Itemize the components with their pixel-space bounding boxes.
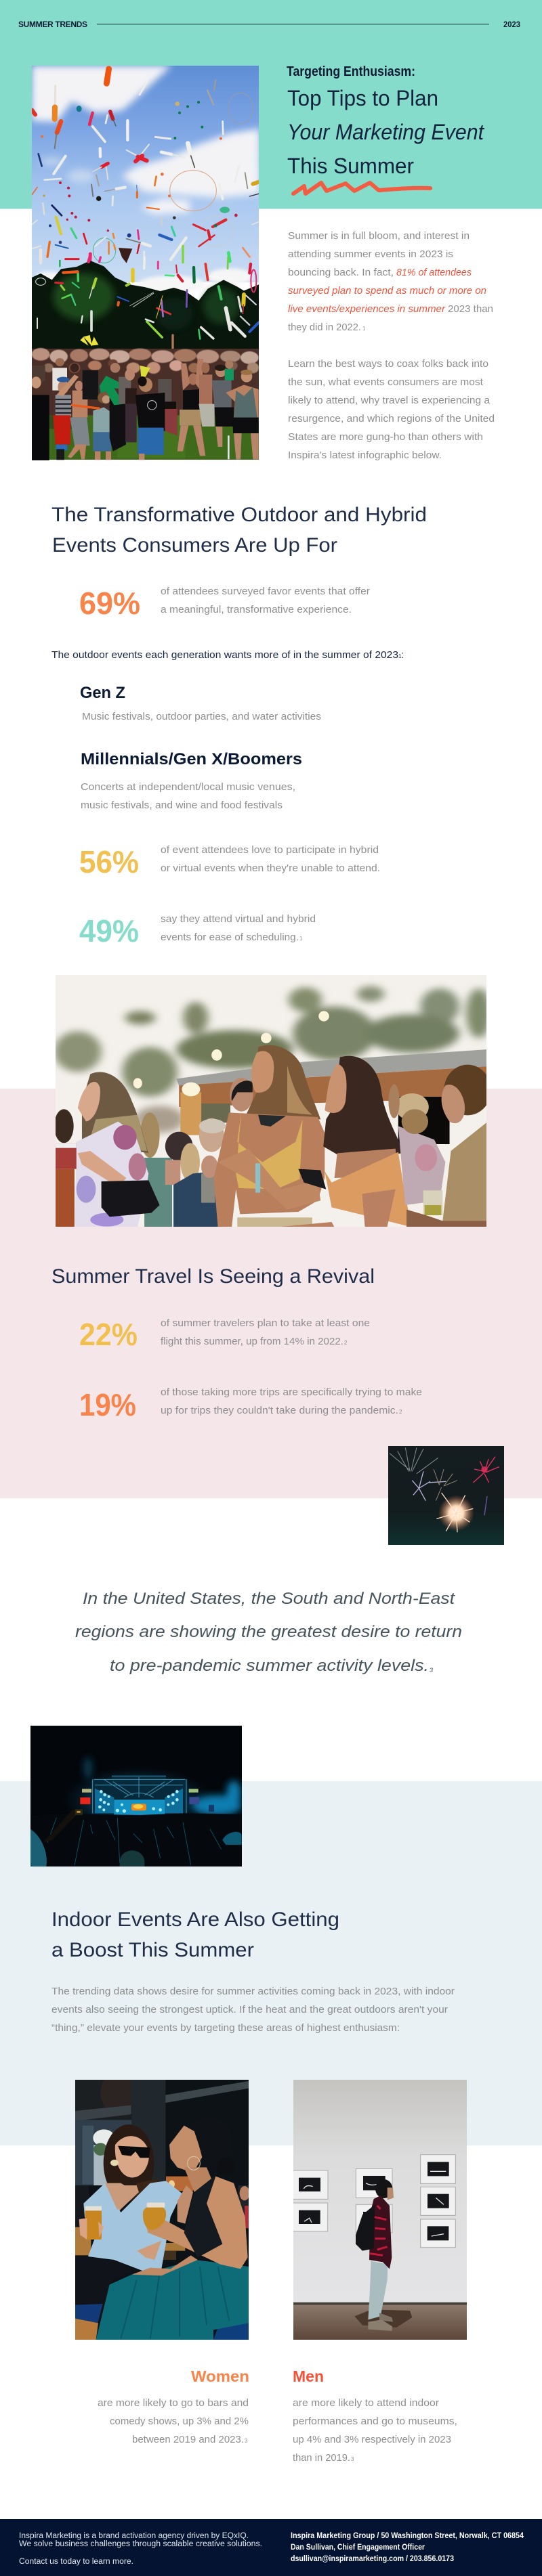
heading: transformative events bbox=[51, 504, 427, 556]
stat: 19%: 19% bbox=[79, 1387, 136, 1422]
teal header background bbox=[0, 0, 542, 209]
generation intro line: : bbox=[401, 649, 404, 661]
stat: 49%: events for ease of scheduling. bbox=[161, 932, 299, 943]
women stat: 3 bbox=[245, 2438, 248, 2444]
footer: dsullivan@inspiramarketing.com / 203.856.0173 bbox=[291, 2555, 454, 2563]
photo: juggling clubs thrown over a crowd bbox=[31, 66, 259, 460]
photo: night concert stage bbox=[30, 1726, 242, 1866]
pale blue section background bbox=[0, 1781, 542, 2145]
header bar: SUMMER TRENDS bbox=[18, 20, 87, 29]
man in grey tee bbox=[212, 380, 232, 408]
generation: Millennials, Gen X, Boomers: music festivals, and wine and food festivals bbox=[81, 800, 283, 811]
stat: 19%: 2 bbox=[399, 1409, 402, 1415]
intro paragraph: 2023 than bbox=[448, 304, 493, 315]
stat: 56%: 56% bbox=[79, 844, 139, 879]
second intro paragraph: likely to attend, why travel is experiencing a bbox=[288, 395, 491, 406]
background people bbox=[54, 1109, 74, 1143]
intro paragraph: live events/experiences in summer bbox=[288, 304, 446, 315]
left woman bbox=[104, 2124, 154, 2201]
intro paragraph: attending summer events in 2023 is bbox=[288, 249, 453, 260]
heading: indoor events: Indoor Events Are Also Getting bbox=[51, 1908, 339, 1931]
intro paragraph: 81% of attendees bbox=[396, 267, 472, 278]
stat: 49%: say they attend virtual and hybrid bbox=[161, 914, 316, 925]
man in floral shirt bbox=[398, 1126, 445, 1205]
pull quote: In the United States, the South and North-East bbox=[83, 1590, 455, 1608]
intro paragraph: they did in 2022. bbox=[288, 322, 361, 333]
main woman bbox=[243, 1045, 320, 1122]
intro paragraph bbox=[288, 231, 493, 333]
stat: 22%: of summer travelers plan to take at least one bbox=[161, 1318, 370, 1329]
men stat: performances and go to museums, bbox=[293, 2416, 457, 2427]
photo: women at a bar bbox=[75, 2070, 249, 2340]
men stat bbox=[293, 2367, 457, 2464]
second intro paragraph bbox=[288, 359, 495, 461]
title: This Summer bbox=[287, 154, 414, 178]
stat: 22%: 2 bbox=[344, 1340, 348, 1346]
intro paragraph: bouncing back. In fact, bbox=[288, 267, 394, 278]
generation intro line: The outdoor events each generation wants more of in the summer of 2023 bbox=[51, 649, 398, 661]
intro paragraph: surveyed plan to spend as much or more on bbox=[288, 286, 486, 297]
stat: 56%: of event attendees love to participate in hybrid bbox=[161, 845, 379, 856]
intro paragraph: Summer is in full bloom, and interest in bbox=[288, 231, 470, 242]
stat: 56%: or virtual events when they're unable to attend. bbox=[161, 863, 380, 874]
footer bbox=[0, 2519, 542, 2576]
men stat: 3 bbox=[351, 2456, 354, 2462]
heading: summer travel: Summer Travel Is Seeing a Revival bbox=[51, 1265, 375, 1288]
generation: Millennials, Gen X, Boomers: Millennials/Gen X/Boomers bbox=[81, 750, 302, 768]
men stat: Men bbox=[293, 2367, 324, 2385]
man in tank top bbox=[226, 385, 259, 418]
man in tan shirt bbox=[442, 1122, 488, 1223]
pull quote: regions are showing the greatest desire to return bbox=[75, 1623, 462, 1641]
photo: festival friends bbox=[54, 975, 491, 1227]
stat: 56% bbox=[79, 844, 380, 879]
squiggle underline bbox=[293, 183, 430, 194]
footer: Dan Sullivan, Chief Engagement Officer bbox=[291, 2544, 425, 2552]
stat: 69%: of attendees surveyed favor events that offer bbox=[161, 586, 370, 597]
second intro paragraph: resurgence, and which regions of the United bbox=[288, 414, 495, 424]
subtitle: Targeting Enthusiasm: bbox=[287, 64, 415, 79]
women stat: between 2019 and 2023. bbox=[132, 2435, 244, 2445]
second intro paragraph: States are more gung-ho than others with bbox=[288, 432, 483, 443]
generation: Gen Z: Music festivals, outdoor parties, and water activities bbox=[82, 712, 321, 722]
stat: 22%: flight this summer, up from 14% in 2022. bbox=[161, 1336, 343, 1347]
man in black tee bbox=[158, 379, 171, 401]
stat: 69% bbox=[79, 586, 370, 621]
men stat: up 4% and 3% respectively in 2023 bbox=[293, 2435, 451, 2445]
header bar bbox=[18, 20, 520, 29]
indoor events paragraph: events also seeing the strongest uptick. If the heat and the great outdoors aren't your bbox=[51, 2005, 448, 2015]
women stat: comedy shows, up 3% and 2% bbox=[110, 2416, 249, 2427]
footer: Contact us today to learn more. bbox=[19, 2558, 133, 2566]
women stat: Women bbox=[191, 2367, 249, 2385]
second intro paragraph: Inspira's latest infographic below. bbox=[288, 450, 442, 461]
stat: 22% bbox=[79, 1317, 370, 1352]
figure bbox=[375, 2179, 392, 2198]
pink section background bbox=[0, 1089, 542, 1498]
shirtless man, patterned shorts bbox=[199, 374, 212, 405]
glasses of beer bbox=[85, 2207, 102, 2240]
second woman bbox=[323, 1056, 404, 1158]
generation: Gen Z bbox=[80, 684, 321, 722]
generation intro line: 1 bbox=[398, 653, 402, 659]
woman 1 bbox=[82, 1072, 148, 1153]
heading: indoor events: a Boost This Summer bbox=[51, 1939, 254, 1961]
pull quote: 3 bbox=[430, 1667, 433, 1674]
second intro paragraph: the sun, what events consumers are most bbox=[288, 377, 483, 388]
stat: 19%: up for trips they couldn't take during the pandemic. bbox=[161, 1405, 398, 1416]
heading: transformative events: The Transformative Outdoor and Hybrid bbox=[51, 504, 427, 526]
indoor events paragraph bbox=[51, 1986, 455, 2034]
second intro paragraph: Learn the best ways to coax folks back into bbox=[288, 359, 488, 370]
shirtless man and grey trousers bbox=[72, 391, 87, 418]
footer: Inspira Marketing is a brand activation agency driven by EQxIQ. bbox=[19, 2532, 249, 2540]
title bbox=[287, 86, 484, 178]
child bbox=[93, 408, 110, 432]
skirt bbox=[96, 2260, 249, 2340]
title: Your Marketing Event bbox=[287, 120, 484, 144]
photo: fireworks bbox=[388, 1446, 504, 1545]
stat: 22%: 22% bbox=[79, 1317, 138, 1352]
striped woman and left figures bbox=[52, 368, 67, 391]
stat: 69%: a meaningful, transformative experience. bbox=[161, 605, 352, 615]
stat: 49% bbox=[79, 913, 316, 948]
men stat: are more likely to attend indoor bbox=[293, 2398, 439, 2409]
header bar: 2023 bbox=[503, 20, 520, 29]
woman in black tank bbox=[183, 389, 199, 410]
lower half of photo bbox=[31, 257, 259, 460]
generation: Gen Z: Gen Z bbox=[80, 684, 125, 702]
intro paragraph: 1 bbox=[362, 326, 366, 332]
indoor events paragraph: “thing,” elevate your events by targeting these areas of highest enthusiasm: bbox=[51, 2023, 400, 2034]
generation: Millennials, Gen X, Boomers: Concerts at independent/local music venues, bbox=[81, 782, 295, 793]
pull quote bbox=[75, 1590, 462, 1675]
pull quote: to pre-pandemic summer activity levels. bbox=[110, 1657, 429, 1675]
men stat: than in 2019. bbox=[293, 2453, 350, 2464]
footer: We solve business challenges through scalable creative solutions. bbox=[19, 2540, 262, 2548]
title: Top Tips to Plan bbox=[287, 86, 438, 110]
photo: man in a gallery bbox=[290, 2080, 467, 2340]
generation: Millennials, Gen X, Boomers bbox=[81, 750, 302, 811]
heading: transformative events: Events Consumers Are Up For bbox=[52, 534, 337, 556]
stat: 49%: 49% bbox=[79, 913, 139, 948]
green sleeves and dark figure bbox=[110, 397, 126, 452]
stat: 49%: 1 bbox=[299, 936, 303, 942]
women stat: are more likely to go to bars and bbox=[98, 2398, 249, 2409]
crowd bbox=[32, 349, 259, 418]
indoor events paragraph: The trending data shows desire for summer activities coming back in 2023, with indoor bbox=[51, 1986, 455, 1997]
stat: 69%: 69% bbox=[79, 586, 140, 621]
stat: 19% bbox=[79, 1387, 422, 1422]
footer: Inspira Marketing Group / 50 Washington Street, Norwalk, CT 06854 bbox=[291, 2532, 524, 2540]
right woman bbox=[186, 2116, 232, 2168]
women stat bbox=[98, 2367, 249, 2445]
stat: 19%: of those taking more trips are specifically trying to make bbox=[161, 1387, 422, 1398]
heading: indoor events bbox=[51, 1908, 339, 1961]
